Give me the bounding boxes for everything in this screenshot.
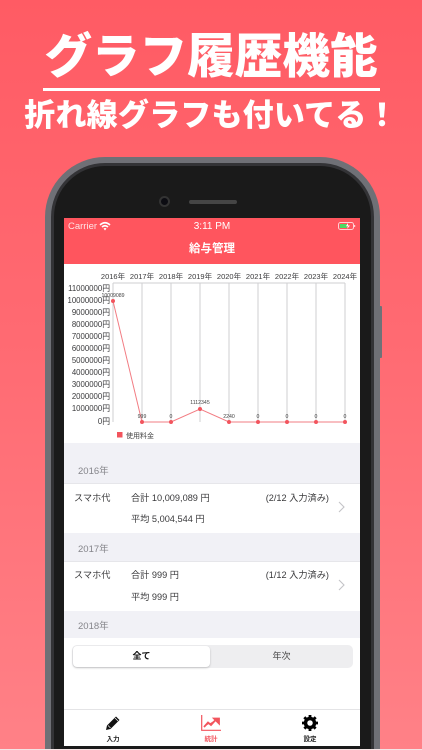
total: 合計 10,009,089 円	[131, 492, 210, 502]
panel: lower white area	[64, 638, 360, 746]
legend	[117, 431, 154, 440]
icon: chevron	[338, 580, 345, 590]
icon: line chart	[201, 715, 221, 731]
row: 2016	[64, 483, 360, 533]
data values: 0	[286, 414, 289, 420]
section header 2016: 2016年	[78, 466, 109, 477]
icon: chevron	[338, 502, 345, 512]
y axis labels: 5000000円	[72, 356, 110, 365]
row: 2017	[64, 561, 360, 611]
data values: 999	[138, 414, 146, 420]
tab label: settings: 設定	[304, 736, 316, 743]
entry count: (1/12 入力済み)	[266, 570, 329, 580]
item name: スマホ代	[74, 492, 110, 502]
y axis labels: 4000000円	[72, 368, 110, 377]
section header 2018: 2018年	[78, 621, 109, 632]
y axis labels: 2000000円	[72, 392, 110, 401]
icon: battery	[338, 222, 356, 230]
x axis year labels: 2023年	[304, 271, 329, 281]
phone side button	[379, 306, 382, 358]
x axis year labels: 2021年	[246, 271, 271, 281]
total: 合計 999 円	[131, 570, 179, 580]
gridlines	[113, 283, 345, 422]
subtitle: 折れ線グラフも付いてる！	[24, 98, 398, 133]
y axis labels: 10000000円	[68, 296, 110, 305]
data values: 0	[315, 414, 318, 420]
data values: 2240	[223, 414, 235, 420]
app screen	[64, 218, 360, 746]
tab bar	[64, 709, 360, 746]
phone body	[45, 157, 380, 750]
y axis labels	[68, 284, 110, 426]
x axis year labels: 2022年	[275, 271, 300, 281]
y axis labels: 3000000円	[72, 380, 110, 389]
data line	[113, 301, 345, 422]
tab label: input: 入力	[106, 736, 120, 743]
bottom edge strip	[0, 749, 422, 750]
phone camera	[159, 196, 170, 207]
entry count: (2/12 入力済み)	[266, 492, 329, 502]
x axis year labels: 2018年	[159, 271, 184, 281]
average: 平均 999 円	[131, 592, 179, 602]
carrier label: Carrier	[68, 221, 97, 232]
tab label: stats: 統計	[204, 736, 218, 743]
selected segment: 全て	[132, 651, 150, 661]
screen heading: 給与管理	[189, 243, 235, 255]
y axis labels: 8000000円	[72, 320, 110, 329]
data values	[101, 293, 347, 420]
data values: 0	[170, 414, 173, 420]
data values: 0	[257, 414, 260, 420]
title underline	[43, 88, 380, 90]
y axis labels: 11000000円	[68, 284, 110, 293]
x axis year labels: 2024年	[333, 271, 358, 281]
selected segment	[73, 646, 210, 667]
data values: 10009089	[101, 293, 125, 299]
y axis labels: 6000000円	[72, 344, 110, 353]
y axis labels: 1000000円	[72, 404, 110, 413]
x axis year labels: 2020年	[217, 271, 242, 281]
navigation bar	[64, 218, 360, 264]
x axis year labels	[101, 271, 358, 281]
line chart	[68, 271, 358, 440]
y axis labels: 7000000円	[72, 332, 110, 341]
segmented control	[72, 645, 353, 668]
icon: gear	[302, 715, 318, 731]
unselected segment: 年次	[272, 651, 290, 661]
data values: 0	[344, 414, 347, 420]
y axis labels: 9000000円	[72, 308, 110, 317]
legend: 使用料金	[126, 431, 154, 440]
panel: line chart	[64, 264, 360, 443]
title: グラフ履歴機能	[44, 31, 378, 84]
data values: 1112345	[190, 400, 210, 406]
data points	[111, 299, 347, 424]
phone speaker	[189, 200, 237, 204]
icon: pencil	[106, 716, 120, 730]
x axis year labels: 2019年	[188, 271, 213, 281]
x axis year labels: 2016年	[101, 271, 126, 281]
x axis year labels: 2017年	[130, 271, 155, 281]
average: 平均 5,004,544 円	[131, 514, 205, 524]
item name: スマホ代	[74, 570, 110, 580]
section header 2017: 2017年	[78, 544, 109, 555]
y axis labels: 0円	[98, 417, 110, 426]
icon: wifi	[100, 222, 110, 230]
status time: 3:11 PM	[194, 221, 230, 232]
